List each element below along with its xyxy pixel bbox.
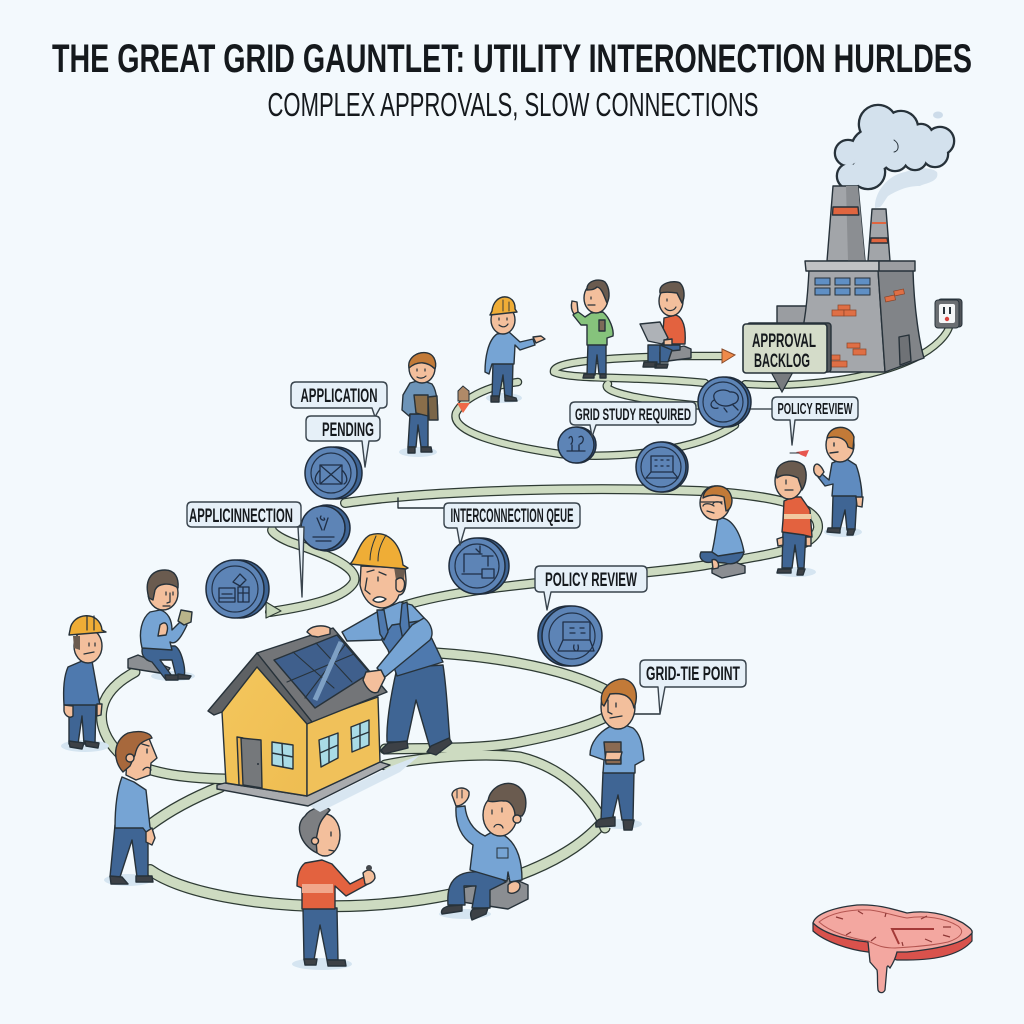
- approval backlog sign: BACKLOG: [754, 350, 810, 372]
- window left: [272, 742, 293, 769]
- coin: connection: [301, 505, 350, 551]
- house with solar roof: [208, 628, 420, 812]
- person: seated with glove: [128, 570, 195, 681]
- factory annex: [777, 306, 808, 325]
- factory front: [800, 270, 885, 372]
- label: application: [291, 382, 387, 417]
- roof: [257, 628, 387, 722]
- label: application: APPLICATION: [300, 386, 378, 407]
- label: policy review: [535, 566, 647, 610]
- coin: substation: [206, 560, 269, 618]
- smoke: [835, 105, 954, 208]
- approval backlog sign: APPROVAL: [752, 330, 816, 352]
- coin: queue: [449, 538, 509, 594]
- coin: policy review: [538, 606, 602, 666]
- windows: [815, 278, 870, 295]
- winding approval path: [101, 324, 950, 906]
- coin: grid study: [558, 427, 596, 463]
- solar panel: [274, 635, 370, 708]
- person: green shirt: [571, 280, 613, 378]
- label: grid-tie point: GRID-TIE POINT: [646, 664, 740, 685]
- label: upper policy review: POLICY REVIEW: [778, 401, 853, 418]
- approval backlog sign: [743, 323, 831, 392]
- main worker: [342, 534, 452, 755]
- label: pending: PENDING: [322, 420, 374, 441]
- person: brown hair standing: [104, 732, 157, 886]
- coin: application: [305, 447, 362, 499]
- coin: cloud study: [698, 377, 751, 427]
- person: seated with raised fist: [439, 783, 528, 920]
- window far right: [351, 720, 369, 752]
- bricks: [830, 289, 905, 367]
- base: [217, 762, 390, 806]
- label: interconnection queue: INTERCONNECTION QEUE: [450, 506, 574, 527]
- person: worker in red shirt: [292, 807, 375, 970]
- label: pending: [306, 416, 380, 467]
- label: interconnection queue: [444, 503, 580, 545]
- ground shadow: [310, 755, 420, 812]
- person: hard hat guide: [485, 297, 545, 403]
- label: grid study required: [570, 402, 696, 437]
- chimneys: [827, 186, 865, 261]
- label: applicinnection: [187, 502, 304, 597]
- subtitle: COMPLEX APPROVALS, SLOW CONNECTIONS: [268, 86, 758, 123]
- right wall: [307, 697, 380, 796]
- label: grid-tie point: [630, 660, 746, 714]
- door: [237, 737, 245, 786]
- person: seated with glasses: [700, 486, 745, 578]
- icon: wall outlet: [935, 299, 962, 328]
- left wall: [222, 665, 307, 796]
- worker hands: [307, 626, 385, 693]
- arrow: orange top marker: [722, 349, 735, 363]
- label: policy review: POLICY REVIEW: [545, 570, 637, 591]
- arrow: green start marker: [266, 602, 281, 618]
- melting clock: [813, 905, 972, 993]
- person: holding phone near grid-tie: [590, 679, 644, 830]
- person: blue shirt waving: [814, 427, 863, 537]
- window right: [319, 733, 338, 767]
- coin: laptop: [636, 442, 688, 492]
- person: red shirt seated with tablet: [640, 282, 691, 368]
- marker: path waypoint: [457, 386, 470, 413]
- person: holding documents: [399, 353, 438, 457]
- person: red vest with dart: [775, 450, 816, 577]
- label: grid study required: GRID STUDY REQUIRED: [575, 405, 691, 424]
- label: applicinnection: APPLICINNECTION: [189, 506, 293, 527]
- label: upper policy review: [749, 397, 858, 445]
- door: [899, 335, 911, 365]
- power plant: [777, 105, 954, 372]
- person: hard hat standing left: [61, 616, 109, 752]
